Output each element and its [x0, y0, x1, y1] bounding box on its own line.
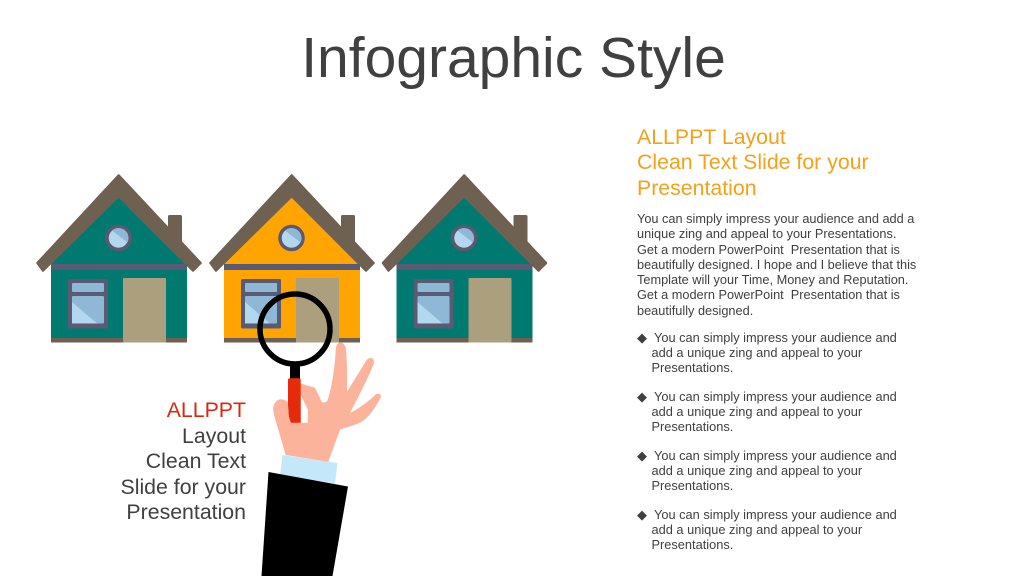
bullet 3: ◆ [637, 448, 647, 463]
bullet 2: ◆ [637, 389, 647, 404]
text block: left caption: Clean Text [146, 449, 246, 473]
text block: intro paragraph: Template will your Time, Money and Reputation. [637, 272, 908, 287]
magnifying glass handle [288, 378, 301, 423]
icon: left teal house [38, 176, 200, 342]
heading: right column: Clean Text Slide for your [637, 150, 869, 174]
text block: left caption: Presentation [126, 500, 246, 524]
text block: intro paragraph: Get a modern PowerPoint Presentation that is [637, 287, 900, 302]
text block: intro paragraph: Get a modern PowerPoint Presentation that is [637, 242, 900, 257]
magnifying glass ring [260, 294, 330, 364]
text block: intro paragraph: You can simply impress your audience and add a [637, 211, 914, 226]
bullet 3: add a unique zing and appeal to your [652, 463, 862, 478]
bullet 3 [637, 448, 897, 493]
bullet 1: add a unique zing and appeal to your [652, 345, 862, 360]
text block: left caption: ALLPPT [167, 398, 246, 422]
bullet 1: You can simply impress your audience and [654, 330, 897, 345]
text block: left caption: Layout [182, 424, 246, 448]
bullet 3: Presentations. [652, 478, 733, 493]
bullet 1: ◆ [637, 330, 647, 345]
icon: right teal house [383, 176, 546, 342]
magnifying glass neck [290, 363, 300, 379]
jacket sleeve [262, 472, 348, 576]
bullet 1: Presentations. [652, 360, 733, 375]
text block: intro paragraph: beautifully designed. [637, 303, 753, 318]
bullet 4 [637, 507, 897, 552]
text block: left caption: Slide for your [121, 475, 246, 499]
icon: centre orange house [210, 176, 374, 342]
text block: intro paragraph: beautifully designed. I hope and I believe that this [637, 257, 916, 272]
bullet 2: Presentations. [652, 419, 733, 434]
text block: intro paragraph [637, 211, 916, 318]
bullet 4: You can simply impress your audience and [654, 507, 897, 522]
bullet 3: You can simply impress your audience and [654, 448, 897, 463]
bullet 4: Presentations. [652, 537, 733, 552]
bullet 4: ◆ [637, 507, 647, 522]
heading: right column: ALLPPT Layout [637, 124, 786, 148]
text block: left caption [121, 398, 246, 524]
icon: hand holding magnifying glass [260, 294, 381, 576]
bullet 1 [637, 330, 897, 375]
heading: right column: Presentation [637, 176, 757, 200]
bullet 2: You can simply impress your audience and [654, 389, 897, 404]
heading: right column [637, 124, 869, 200]
text block: intro paragraph: unique zing and appeal to your Presentations. [637, 226, 896, 241]
bullet 2: add a unique zing and appeal to your [652, 404, 862, 419]
bullet 2 [637, 389, 897, 434]
sleeve cuff [280, 455, 338, 484]
hand [273, 342, 381, 462]
title: Infographic Style [301, 26, 726, 90]
bullet 4: add a unique zing and appeal to your [652, 522, 862, 537]
gap between thumb and index finger [301, 395, 308, 423]
